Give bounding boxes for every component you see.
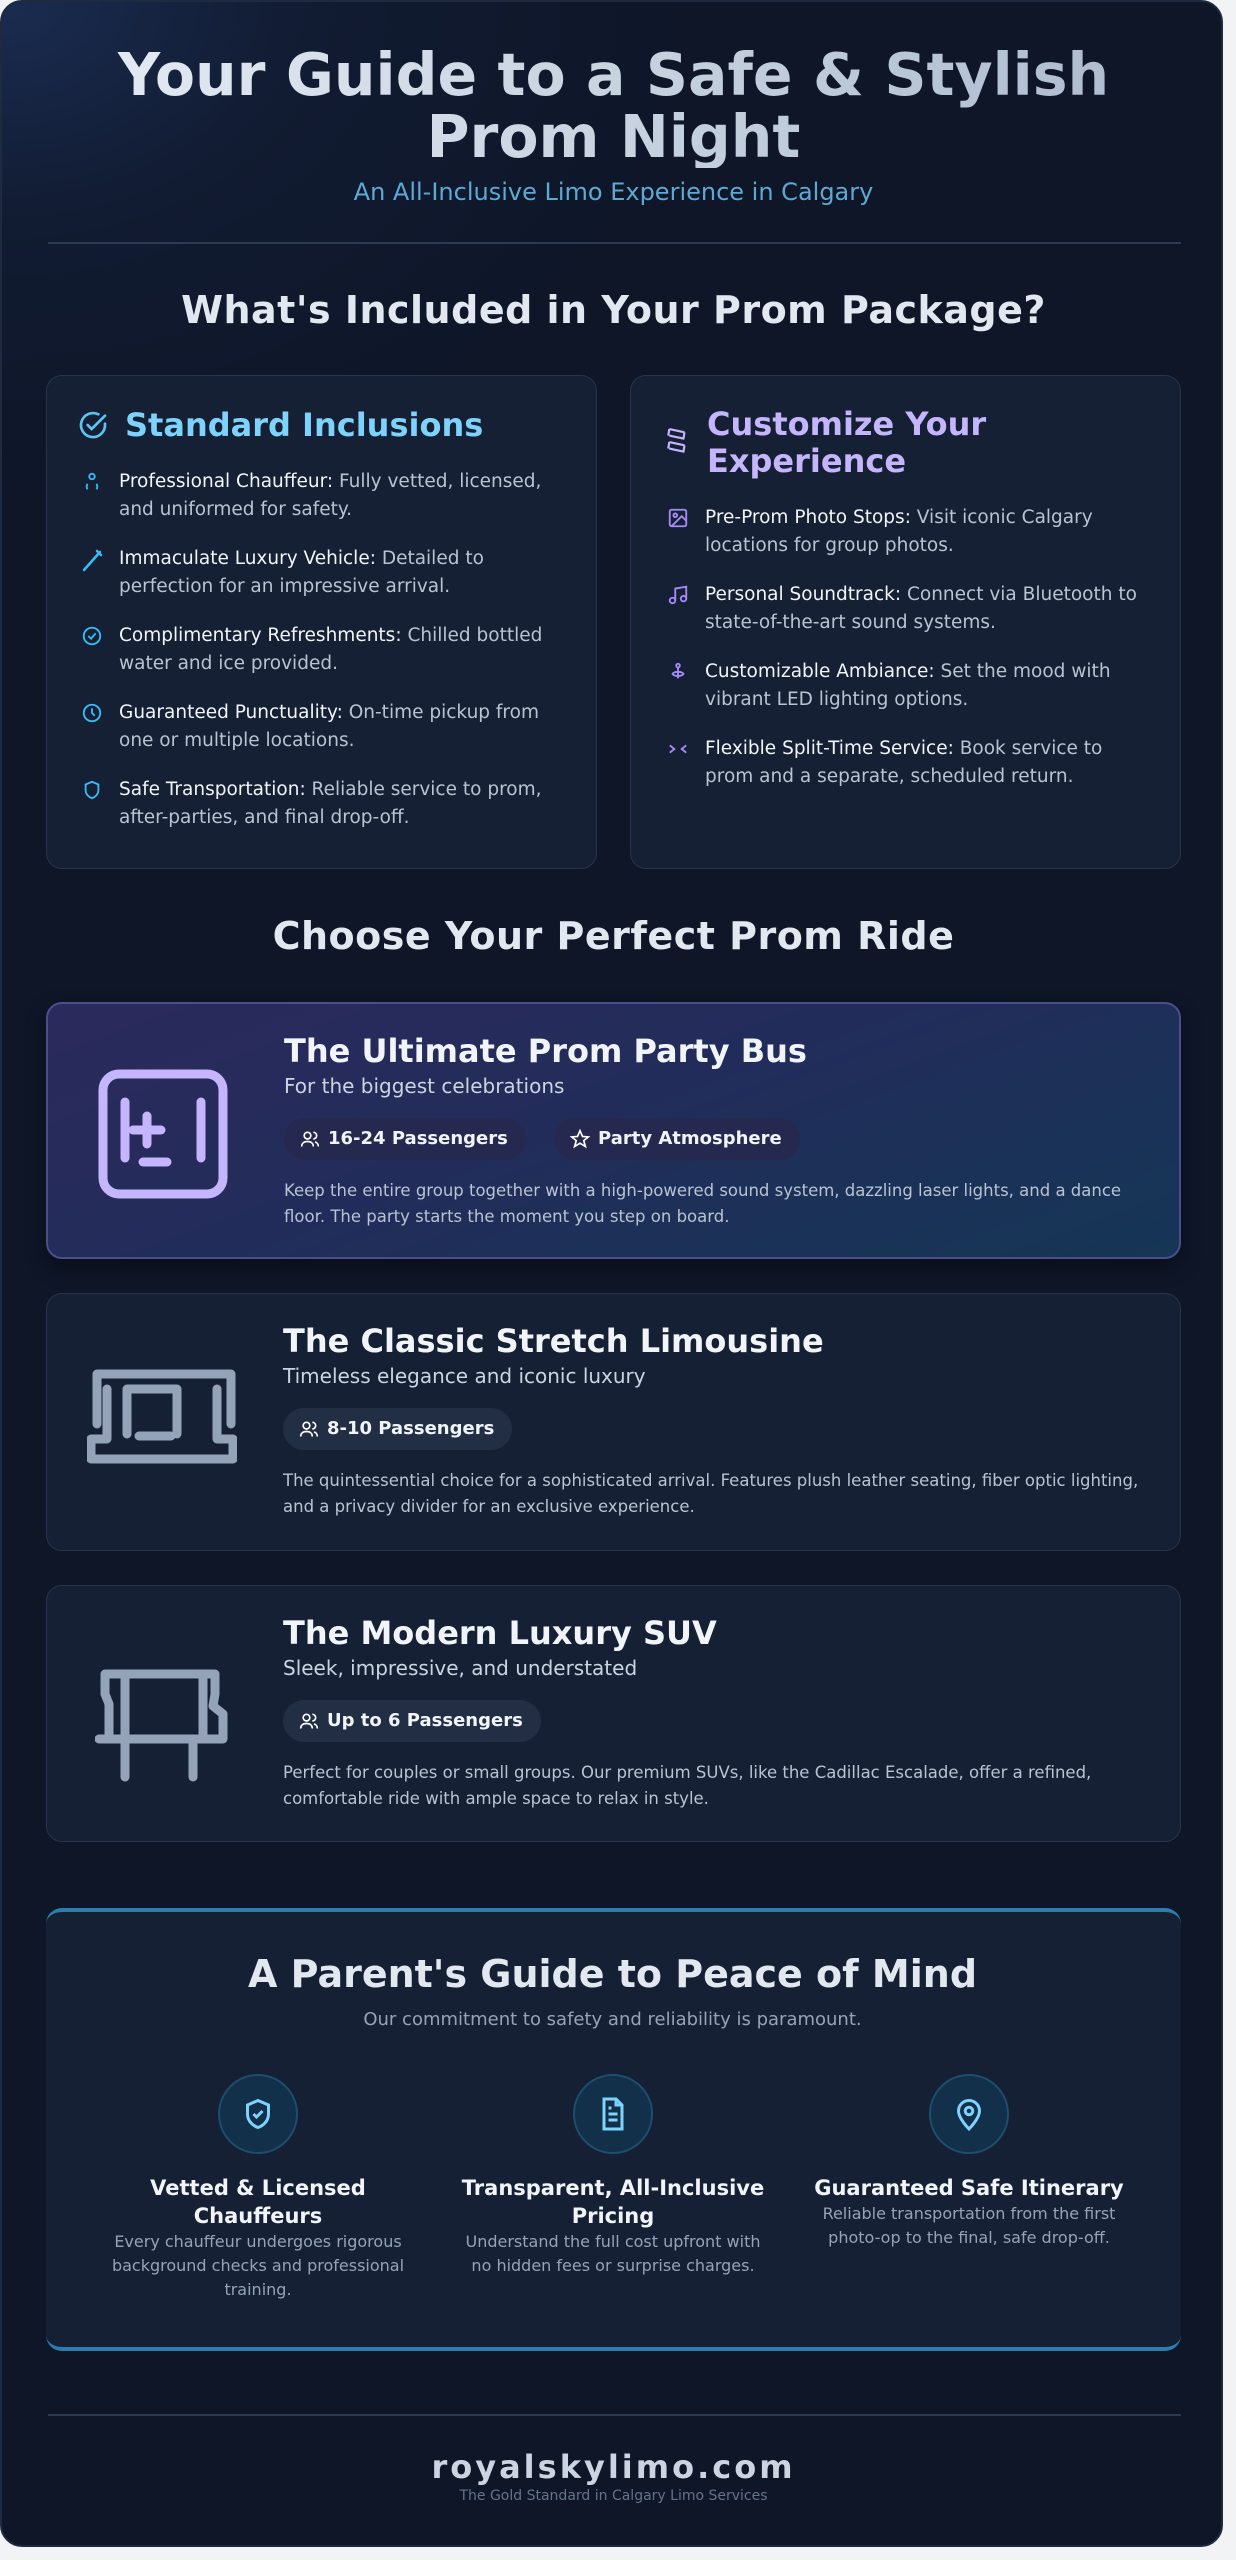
item: photo stops: Pre-Prom Photo Stops: Visit iconic Calgary locations for group photos. [705,507,1093,556]
pill: 8-10 [283,1408,512,1450]
footer: tagline: The Gold Standard in Calgary Limo Services [459,2488,768,2504]
column: vetted [112,2074,404,2299]
item: chauffeur: Professional Chauffeur: Fully vetted, licensed, and uniformed for safety. [119,471,541,520]
title [2,44,1225,168]
pill: 8-10: 8-10 Passengers [327,1418,494,1439]
vehicle card: party bus [46,1002,1181,1259]
item: refreshments: Complimentary Refreshments: Chilled bottled water and ice provided. [119,625,542,674]
vehicle card: party bus: For the biggest celebrations [284,1074,564,1098]
panel: parents guide [46,1908,1181,2351]
panel: customize [630,375,1181,869]
vehicle card: SUV: Perfect for couples or small groups. Our premium SUVs, like the Cadillac Escalade, offer a refined, comfortable ride with ample space to relax in style. [283,1763,1091,1808]
icon: party bus [98,1070,228,1198]
title: limo: The Classic Stretch Limousine [283,1322,824,1360]
column: vetted: Every chauffeur undergoes rigorous background checks and professional training. [112,2232,404,2299]
footer: domain: royalskylimo.com [431,2448,796,2486]
column: pricing [462,2074,764,2275]
vehicle card: SUV [46,1585,1181,1842]
item: ambiance: Customizable Ambiance: Set the mood with vibrant LED lighting options. [705,661,1111,710]
pill: party [554,1118,800,1160]
title: Your Guide to a Safe & Stylish [118,41,1109,109]
column: pricing: Transparent, All-Inclusive [462,2176,764,2200]
heading: included: What's Included in Your Prom Package? [181,288,1046,332]
vehicle card: party bus: Keep the entire group together with a high-powered sound system, dazzling laser lights, and a dance floor. The party starts the moment you step on board. [284,1181,1121,1226]
title: suv: The Modern Luxury SUV [283,1614,717,1652]
heading: choose ride: Choose Your Perfect Prom Ride [273,914,954,958]
heading: standard inclusions: Standard Inclusions [125,406,483,444]
title: Prom Night [427,103,800,171]
icon: suv [95,1670,228,1782]
pill: passengers [284,1118,526,1160]
title: party bus: The Ultimate Prom Party Bus [284,1032,807,1070]
column: itinerary: Guaranteed Safe Itinerary [814,2176,1124,2200]
item: split time: Flexible Split-Time Service: Book service to prom and a separate, scheduled return. [705,738,1102,787]
heading: parents: A Parent's Guide to Peace of Mind [248,1952,977,1996]
panel: standard inclusions [46,375,597,869]
pill: passengers: 16-24 Passengers [328,1128,508,1149]
item: transport: Safe Transportation: Reliable service to prom, after-parties, and final drop-off. [119,779,541,828]
column: vetted: Vetted & Licensed [150,2176,366,2200]
vehicle card: limousine [46,1293,1181,1551]
vehicle card: limousine: Timeless elegance and iconic luxury [283,1364,646,1388]
column: vetted: Chauffeurs [194,2204,322,2228]
vehicle card: limousine: The quintessential choice for a sophisticated arrival. Features plush leather seating, fiber optic lighting, and a privacy divider for an exclusive experience. [283,1471,1138,1516]
pill: up to 6: Up to 6 Passengers [327,1710,523,1731]
pill: up to 6 [283,1700,541,1742]
vehicle card: SUV: Sleek, impressive, and understated [283,1656,637,1680]
heading: customize: Experience [707,442,906,480]
subtitle: An All-Inclusive Limo Experience in Calgary [354,178,873,206]
icon: limo [87,1370,237,1464]
column: pricing: Understand the full cost upfront with no hidden fees or surprise charges. [466,2232,760,2275]
heading: customize: Customize Your [707,405,986,443]
column: pricing: Pricing [572,2204,654,2228]
item: punctuality: Guaranteed Punctuality: On-time pickup from one or multiple locations. [119,702,539,751]
pill: party: Party Atmosphere [598,1128,782,1149]
column: itinerary [814,2074,1124,2247]
column: itinerary: Reliable transportation from the first photo-op to the final, safe drop-off. [823,2204,1115,2247]
item: vehicle: Immaculate Luxury Vehicle: Detailed to perfection for an impressive arrival. [119,548,484,597]
item: soundtrack: Personal Soundtrack: Connect via Bluetooth to state-of-the-art sound systems. [705,584,1137,633]
panel: parents guide: Our commitment to safety and reliability is paramount. [363,2009,862,2030]
heading: customize [667,405,986,480]
